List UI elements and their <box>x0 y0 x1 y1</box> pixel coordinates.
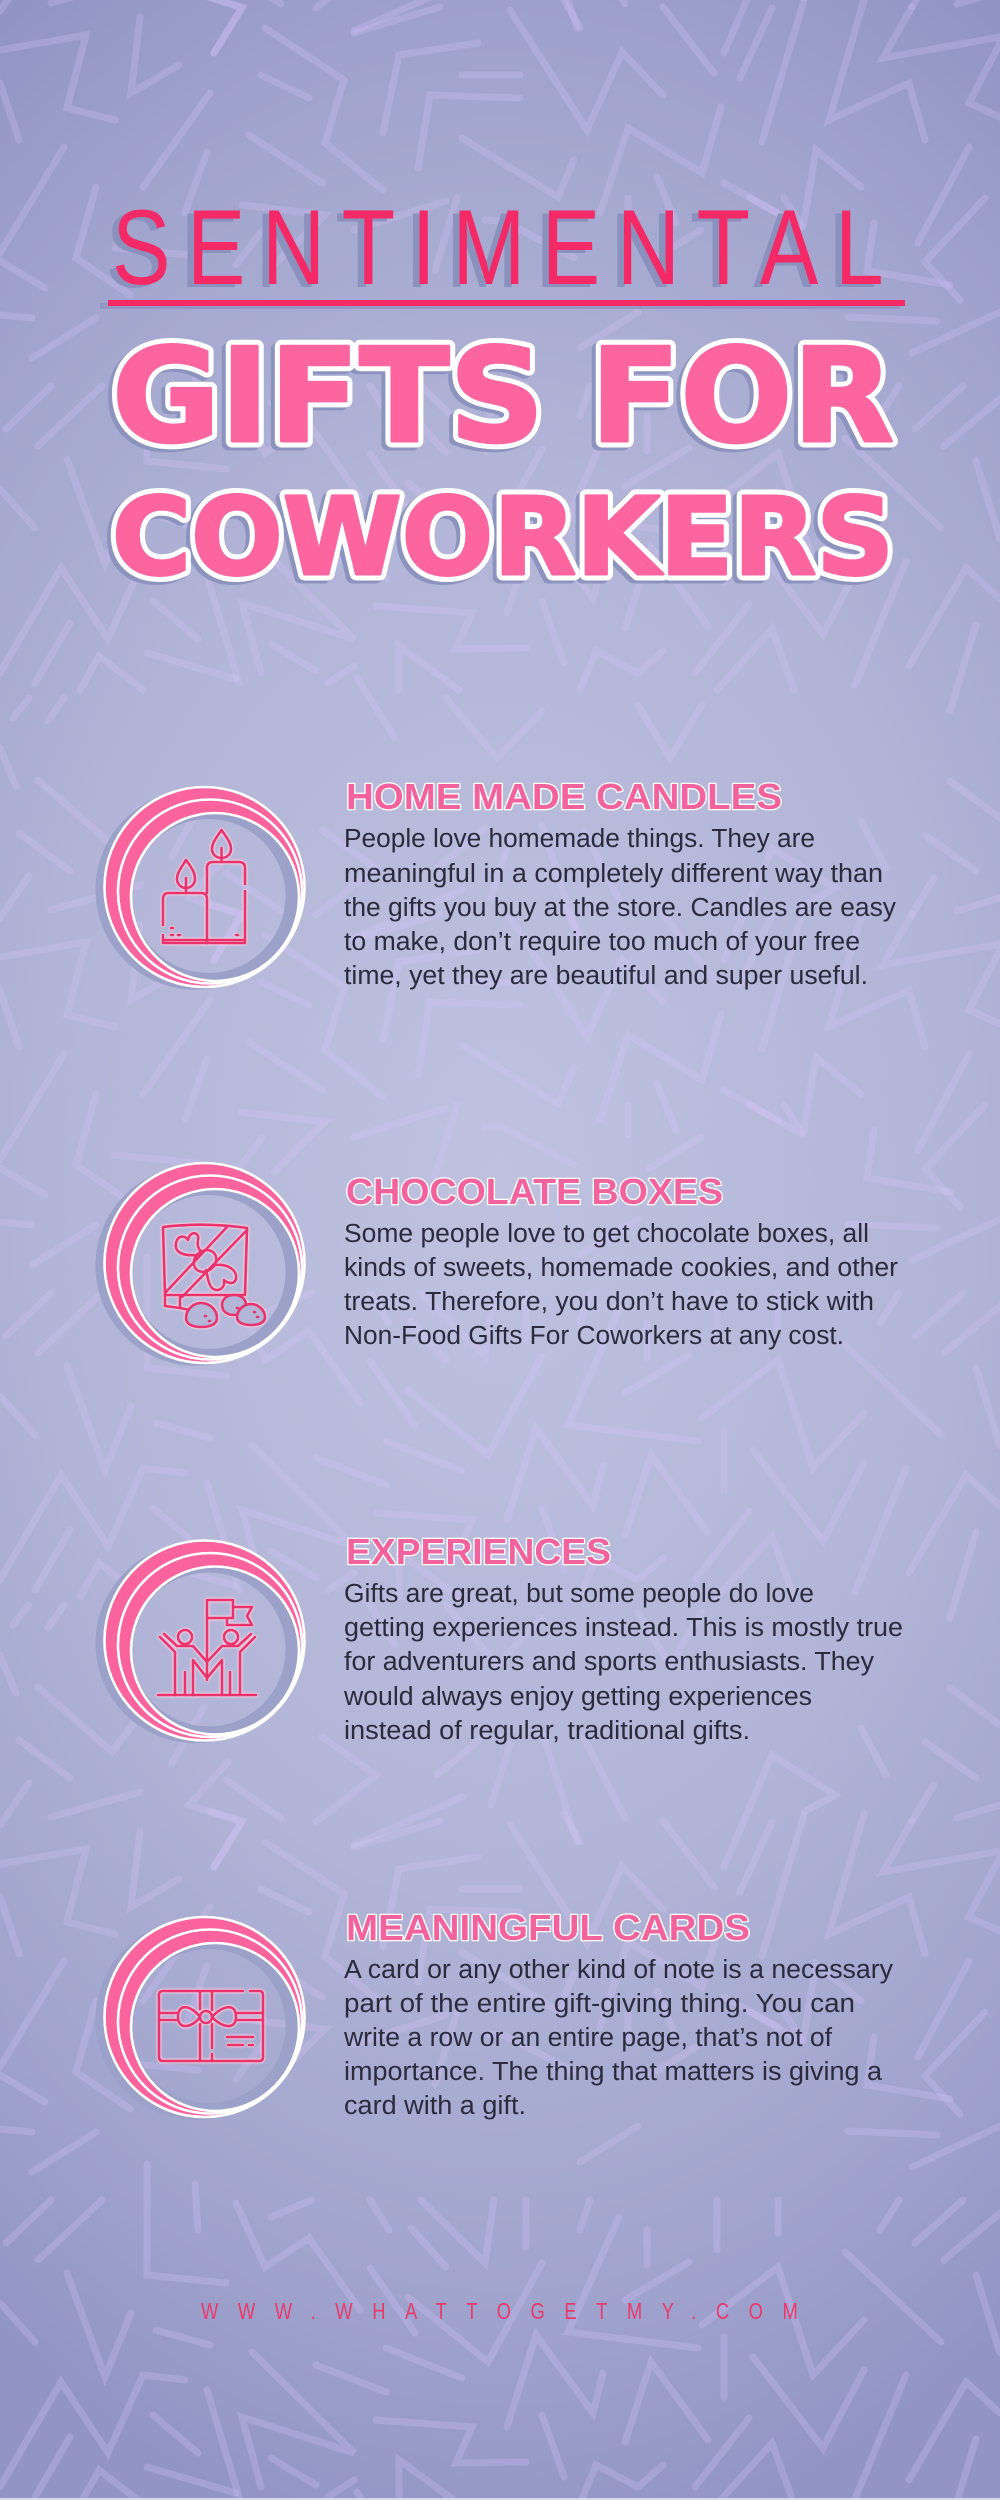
title block <box>100 187 905 600</box>
text: meaningful cards: card with a gift. <box>344 2092 526 2120</box>
text: experiences: Gifts are great, but some people do love <box>344 1580 814 1608</box>
text: home made candles: the gifts you buy at the store. Candles are easy <box>344 894 896 922</box>
panel: chocolate boxes <box>95 1163 899 1366</box>
text: meaningful cards: A card or any other kind of note is a necessary <box>344 1956 893 1984</box>
text: experiences <box>343 1580 903 1745</box>
title: SENTIMENTAL: SENTIMENTAL <box>112 187 884 307</box>
icon: people with flag in ring <box>95 1540 304 1743</box>
text: chocolate boxes <box>344 1220 899 1350</box>
title: COWORKERS: COWORKERS <box>112 476 894 600</box>
icon: candles in ring <box>95 787 304 990</box>
text: meaningful cards: part of the entire gift-giving thing. You can <box>344 1990 855 2018</box>
icon: chocolate box in ring <box>95 1163 304 1366</box>
icon: gift card in ring <box>95 1917 304 2120</box>
text: home made candles: time, yet they are beautiful and super useful. <box>344 962 868 990</box>
footer url: WWW.WHATTOGETMY.COM <box>201 2299 798 2325</box>
text: chocolate boxes: treats. Therefore, you don’t have to stick with <box>344 1288 874 1316</box>
text: experiences: would always enjoy getting experiences <box>343 1683 812 1711</box>
text: home made candles: to make, don’t require too much of your free <box>344 928 860 956</box>
title underline <box>100 300 905 309</box>
text: chocolate boxes: kinds of sweets, homemade cookies, and other <box>344 1254 899 1282</box>
heading: experiences: EXPERIENCES <box>346 1531 611 1572</box>
title: GIFTS FOR: GIFTS FOR <box>112 320 894 472</box>
text: chocolate boxes: Non-Food Gifts For Coworkers at any cost. <box>344 1322 844 1350</box>
text: experiences: instead of regular, traditional gifts. <box>344 1717 750 1745</box>
text: home made candles <box>344 825 896 990</box>
title: COWORKERS: COWORKERS <box>112 476 894 600</box>
text: home made candles: People love homemade things. They are <box>344 825 815 853</box>
title: GIFTS FOR: GIFTS FOR <box>112 320 894 472</box>
text: meaningful cards: importance. The thing that matters is giving a <box>344 2058 883 2086</box>
panel: home made candles <box>95 776 896 990</box>
text: meaningful cards: write a row or an entire page, that’s not of <box>343 2024 833 2052</box>
text: experiences: for adventurers and sports enthusiasts. They <box>344 1648 874 1676</box>
text: meaningful cards <box>343 1956 893 2120</box>
text: home made candles: meaningful in a completely different way than <box>344 860 883 888</box>
text: experiences: getting experiences instead. This is mostly true <box>344 1614 903 1642</box>
panel: meaningful cards <box>95 1907 893 2120</box>
heading: meaningful cards: MEANINGFUL CARDS <box>346 1907 750 1948</box>
panel: experiences <box>95 1531 903 1745</box>
heading: chocolate boxes: CHOCOLATE BOXES <box>346 1171 723 1212</box>
text: chocolate boxes: Some people love to get chocolate boxes, all <box>344 1220 869 1248</box>
heading: home made candles: HOME MADE CANDLES <box>346 776 782 817</box>
